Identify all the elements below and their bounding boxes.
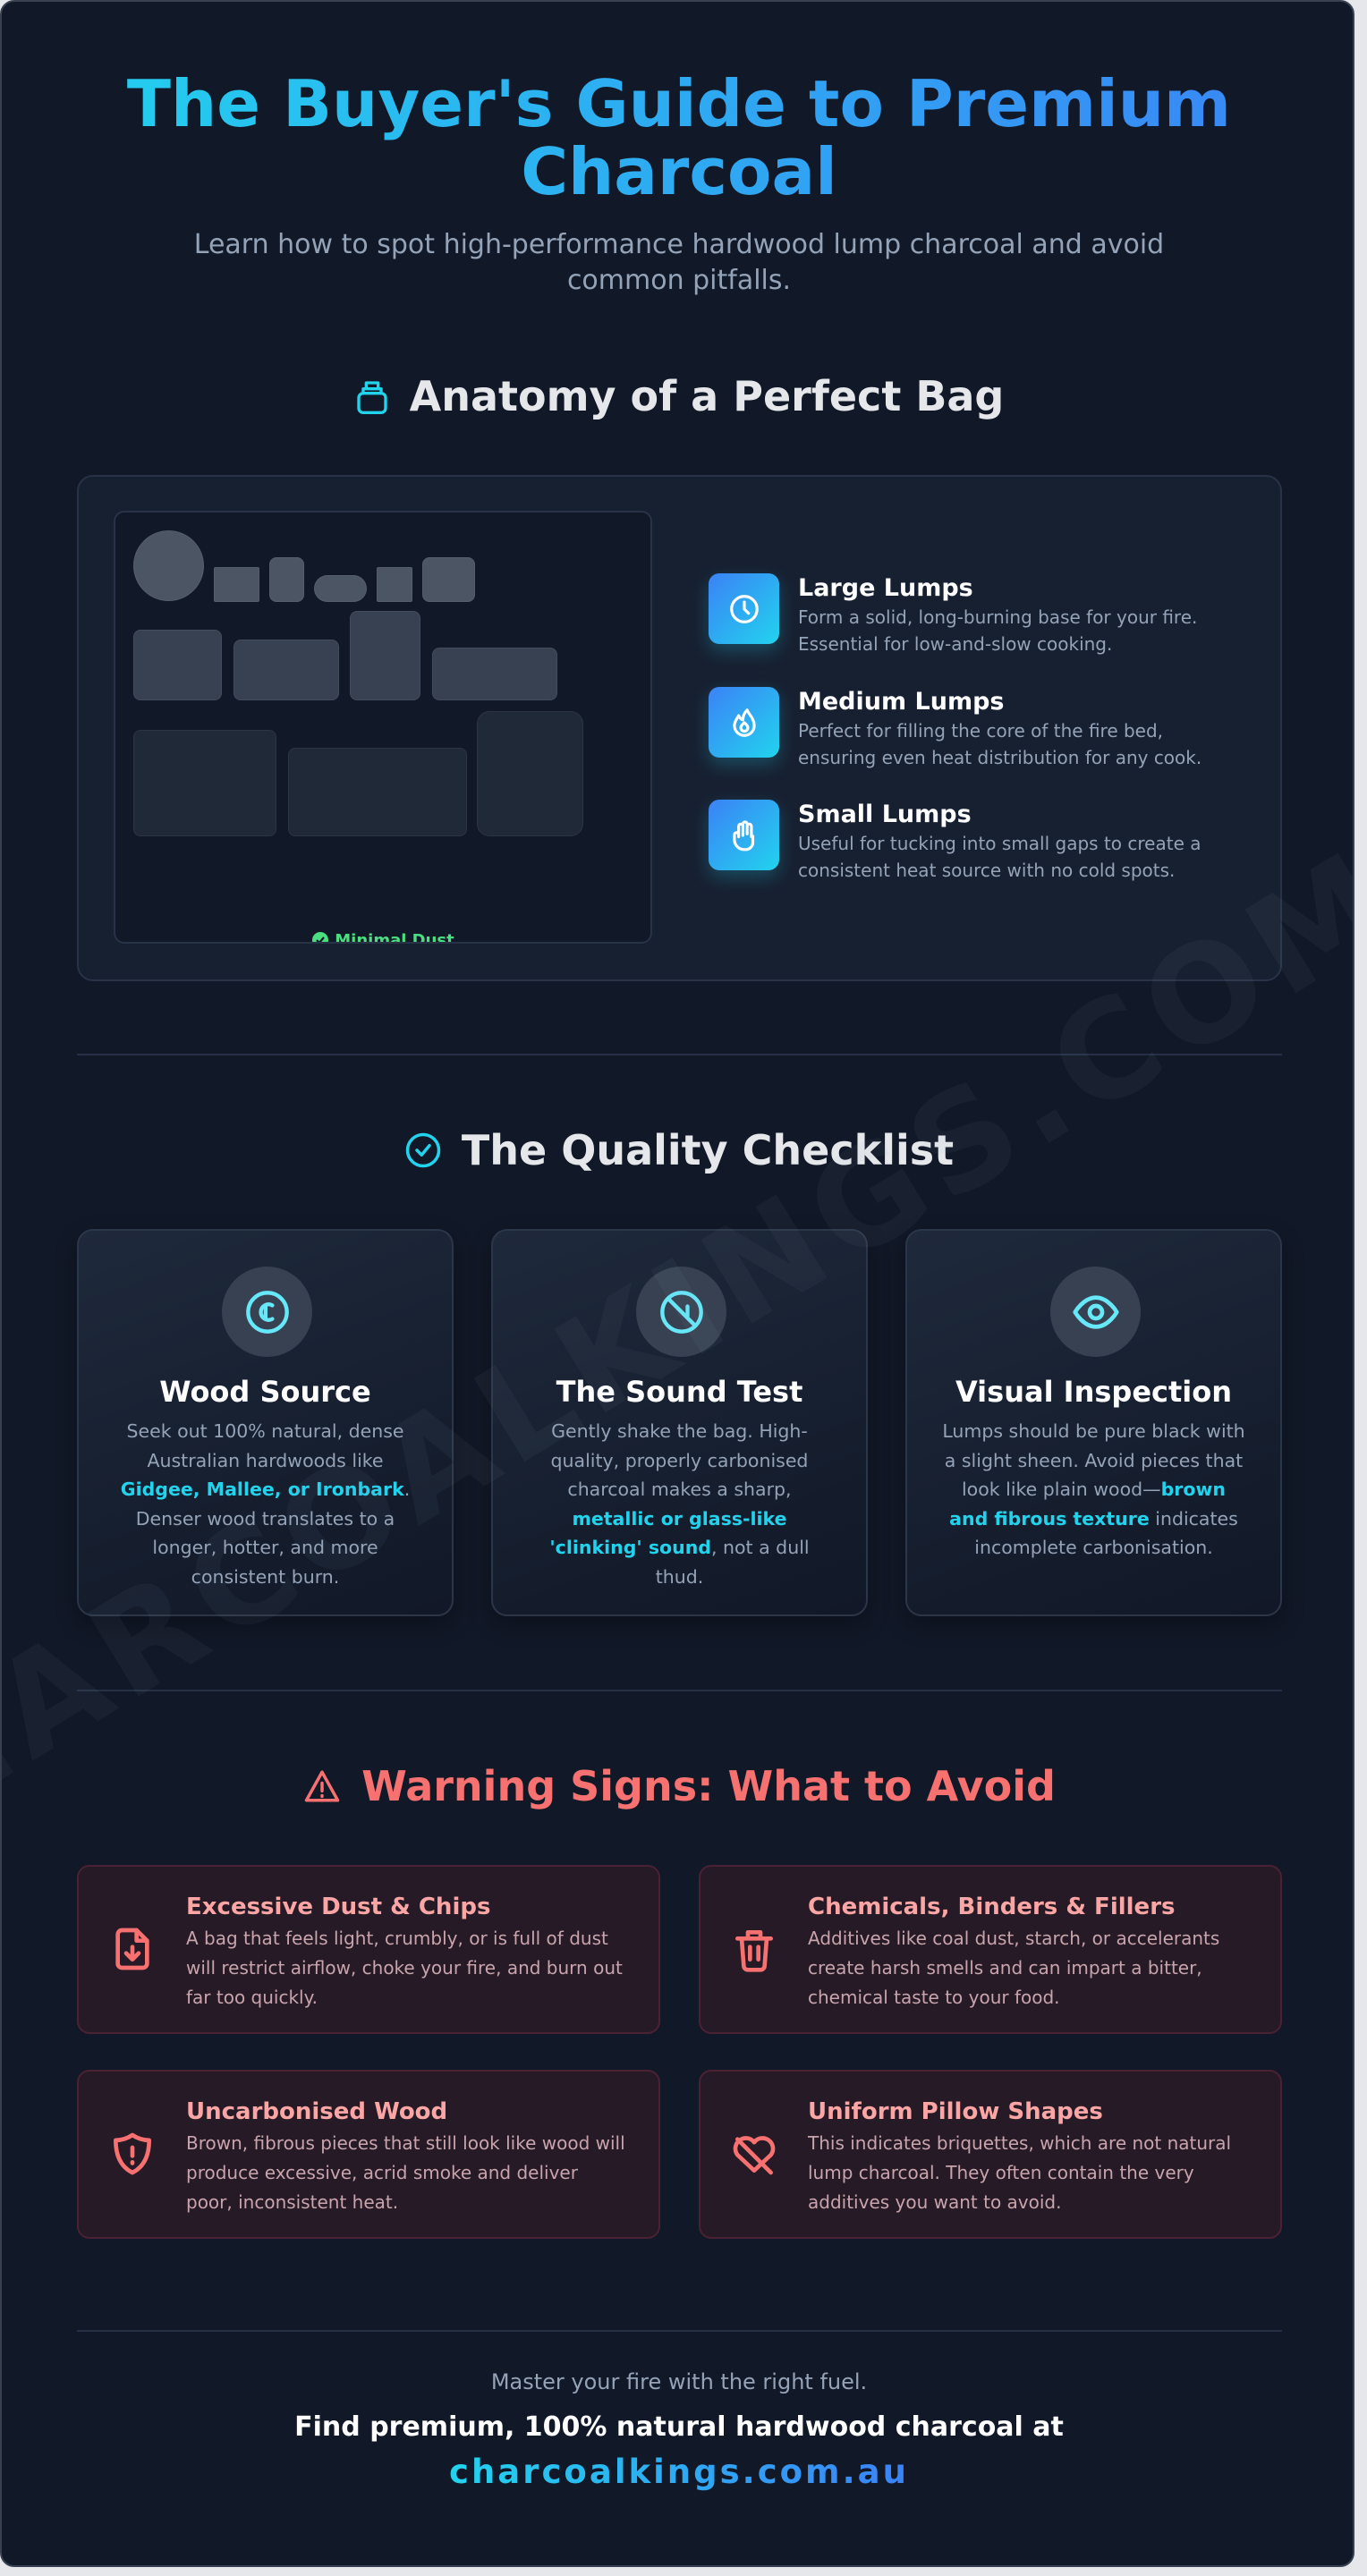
subtitle: Learn how to spot high-performance hardwood lump charcoal and avoid (194, 229, 1164, 260)
item: medium lumps: ensuring even heat distribution for any cook. (798, 747, 1201, 768)
icon: eye (1050, 1267, 1141, 1357)
warning: dust: A bag that feels light, crumbly, or is full of dust (186, 1928, 608, 1949)
bag illustration (114, 511, 652, 944)
card: wood source: Denser wood translates to a (136, 1508, 395, 1530)
card: wood source: Seek out 100% natural, dense (126, 1420, 404, 1442)
item: small lumps (701, 800, 1201, 886)
warning: uncarbonised (77, 2070, 660, 2239)
warning: chemicals: Additives like coal dust, starch, or accelerants (808, 1928, 1219, 1949)
warning: pillow shapes: Uniform Pillow Shapes (808, 2098, 1103, 2125)
card: sound test: quality, properly carbonised (551, 1449, 808, 1470)
icon: file download (115, 1928, 149, 1970)
footer: Find premium, 100% natural hardwood charcoal at (294, 2411, 1064, 2443)
card: wood source: Gidgee, Mallee, or Ironbark. (121, 1479, 410, 1500)
warning: pillow shapes: additives you want to avoid. (808, 2191, 1061, 2213)
warning: pillow shapes: This indicates briquettes, which are not natural (808, 2132, 1231, 2154)
item: small lumps: Useful for tucking into small gaps to create a (798, 833, 1201, 854)
heading: warning signs: Warning Signs: What to Avoid (361, 1762, 1056, 1810)
footer: charcoalkings.com.au (449, 2453, 909, 2491)
item: small lumps: consistent heat source with no cold spots. (798, 860, 1175, 881)
footer (294, 2369, 1064, 2491)
warning: dust: far too quickly. (186, 1987, 318, 2008)
card: visual inspection: Visual Inspection (955, 1375, 1232, 1409)
heading: anatomy: Anatomy of a Perfect Bag (410, 372, 1004, 420)
warning: dust: will restrict airflow, choke your fire, and burn out (186, 1957, 623, 1979)
card: visual inspection: and fibrous texture indicates (949, 1508, 1238, 1530)
icon: clock (709, 573, 779, 644)
icon: heart off (734, 2136, 775, 2175)
card: sound test: 'clinking' sound, not a dull (549, 1537, 810, 1558)
item: large lumps: Form a solid, long-burning base for your fire. (798, 606, 1197, 628)
footer: Master your fire with the right fuel. (491, 2369, 867, 2394)
card: visual inspection (905, 1229, 1282, 1616)
icon: hand (709, 800, 779, 870)
title (2, 70, 1356, 206)
card: sound test (491, 1229, 868, 1616)
title: The Buyer's Guide to Premium (127, 66, 1231, 141)
card: sound test: thud. (656, 1565, 703, 1587)
panel: anatomy (77, 475, 1282, 981)
subtitle: common pitfalls. (567, 265, 791, 296)
card: wood source: Australian hardwoods like (147, 1449, 384, 1470)
warning: chemicals: chemical taste to your food. (808, 1987, 1060, 2008)
subtitle (194, 229, 1164, 296)
card: visual inspection: Lumps should be pure black with (942, 1420, 1245, 1442)
warning: pillow shapes: lump charcoal. They often contain the very (808, 2162, 1194, 2183)
card: visual inspection: look like plain wood—brown (962, 1479, 1226, 1500)
warning: chemicals (699, 1865, 1282, 2034)
warning: uncarbonised: poor, inconsistent heat. (186, 2191, 398, 2213)
warning: dust: Excessive Dust & Chips (186, 1894, 490, 1920)
heading: quality checklist: The Quality Checklist (462, 1126, 954, 1174)
card: wood source: longer, hotter, and more (152, 1537, 378, 1558)
card: sound test: The Sound Test (556, 1375, 802, 1409)
item: medium lumps: Perfect for filling the core of the fire bed, (798, 720, 1163, 741)
warning: chemicals: Chemicals, Binders & Fillers (808, 1894, 1176, 1920)
card: wood source: consistent burn. (191, 1565, 339, 1587)
icon: sound off (636, 1267, 726, 1357)
warning: dust (77, 1865, 660, 2034)
icon: check circle (406, 1132, 440, 1168)
item: large lumps (701, 572, 1197, 658)
item: large lumps: Large Lumps (798, 574, 973, 602)
card: wood source: Wood Source (159, 1375, 371, 1409)
warning: pillow shapes (699, 2070, 1282, 2239)
icon: bag (357, 381, 387, 414)
card: wood source (77, 1229, 454, 1616)
warning: uncarbonised: produce excessive, acrid smoke and deliver (186, 2162, 578, 2183)
warning: chemicals: create harsh smells and can impart a bitter, (808, 1957, 1202, 1979)
icon: flame (709, 687, 779, 758)
card: visual inspection: a slight sheen. Avoid pieces that (945, 1449, 1243, 1470)
item: small lumps: Small Lumps (798, 801, 972, 828)
card: visual inspection: incomplete carbonisation. (974, 1537, 1213, 1558)
item: large lumps: Essential for low-and-slow cooking. (798, 633, 1112, 655)
icon: shield alert (114, 2132, 151, 2175)
warning: uncarbonised: Uncarbonised Wood (186, 2098, 447, 2125)
icon: coin (222, 1267, 312, 1357)
card: sound test: charcoal makes a sharp, (567, 1479, 792, 1500)
title: Charcoal (521, 134, 837, 209)
warning: uncarbonised: Brown, fibrous pieces that still look like wood will (186, 2132, 625, 2154)
icon: trash (735, 1930, 773, 1972)
item: medium lumps (701, 687, 1201, 773)
card: sound test: metallic or glass-like (572, 1508, 787, 1530)
item: medium lumps: Medium Lumps (798, 688, 1004, 716)
icon: warning triangle (304, 1770, 340, 1801)
card: sound test: Gently shake the bag. High- (551, 1420, 808, 1442)
